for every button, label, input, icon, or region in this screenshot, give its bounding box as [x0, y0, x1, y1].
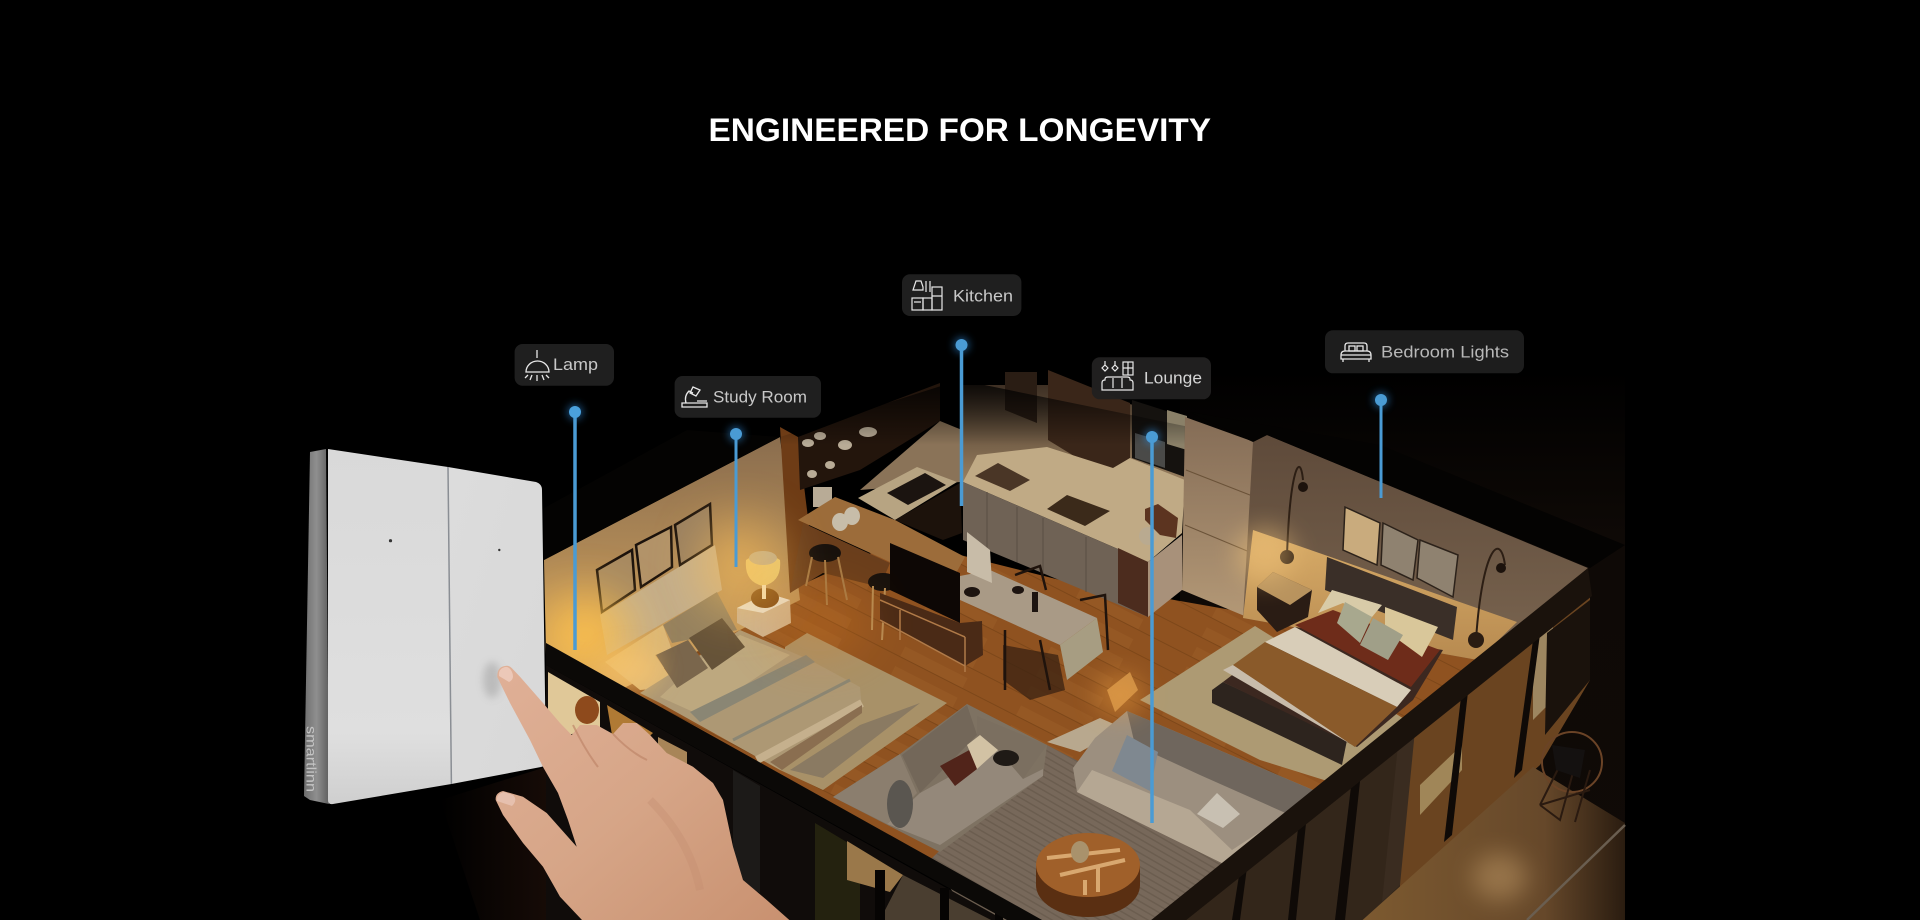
sofa right: [1073, 711, 1313, 868]
kitchen left counter: [858, 467, 957, 520]
warm lighting: [540, 370, 1295, 717]
switch left rocker: [328, 449, 451, 804]
kitchen left backsplash: [860, 421, 962, 490]
toaster: [1145, 504, 1178, 538]
icon: pendant lamp: [525, 350, 549, 381]
breakfast bar: [790, 497, 965, 640]
lounge rug: [930, 745, 1270, 920]
rug bedroom one: [780, 633, 947, 790]
label: Lounge: Lounge: [1144, 370, 1202, 388]
window zone below left beam: [546, 665, 1040, 920]
balcony floor: [1357, 767, 1625, 920]
switch indicator dots: [389, 539, 500, 551]
apartment cutaway scene: [540, 370, 1625, 920]
kitchen back wall and cabinets: [962, 370, 1187, 617]
sinks: [975, 463, 1030, 491]
glass zone below right beam: [1163, 597, 1590, 920]
label: Bedroom Lights: Bedroom Lights: [1381, 344, 1509, 362]
label: Bedroom Lights: [1325, 330, 1524, 373]
side table: [1047, 718, 1123, 752]
balcony railing: [1527, 825, 1625, 920]
counter top: [963, 447, 1185, 562]
bedroom rug: [1140, 626, 1470, 785]
dark surround of the apartment: [440, 370, 1625, 920]
knuckle shading: [573, 725, 647, 767]
brand text: smartlinn: [304, 726, 320, 792]
pin: Kitchen: [954, 337, 970, 506]
sofa left: [833, 704, 1047, 852]
icon: desk lamp: [682, 387, 707, 407]
icon: kitchen: [912, 281, 942, 310]
pin: Study Room: [728, 426, 744, 567]
fingernails: [499, 667, 513, 682]
dining table and TV: [880, 532, 1138, 712]
switch right rocker: [448, 467, 546, 784]
wardrobe: [1182, 417, 1268, 620]
bedroom one wall: [544, 437, 800, 690]
label: Lounge: [1092, 357, 1211, 399]
label: Kitchen: [902, 274, 1021, 316]
title: ENGINEERED FOR LONGEVITY: [708, 112, 1211, 148]
bed one: [605, 592, 862, 770]
label: Study Room: [675, 376, 821, 418]
label: Kitchen: Kitchen: [953, 288, 1013, 306]
wall lamps: [1287, 467, 1505, 640]
wood floor: [546, 540, 1588, 920]
bed two: [1212, 557, 1457, 765]
balcony chair: [1540, 732, 1602, 822]
smart switch: [304, 449, 546, 804]
wall art: [597, 504, 712, 612]
icon: bed: [1341, 343, 1371, 362]
icon: sofa and pendants: [1102, 361, 1133, 390]
label: Lamp: [515, 344, 614, 386]
hand pressing the switch: [496, 666, 795, 920]
label: Lamp: Lamp: [553, 356, 598, 374]
bedroom two wall: [1243, 435, 1588, 660]
label: Study Room: Study Room: [713, 388, 807, 406]
switch divider: [448, 467, 451, 784]
lamp and bedside table: [737, 551, 791, 637]
ceiling band and beams: [544, 412, 1625, 920]
pin: Lamp: [567, 404, 583, 650]
kitchen shelving wall: [780, 383, 962, 593]
switch metal frame: [304, 449, 329, 804]
pin: Bedroom Lights: [1373, 392, 1389, 498]
pin: Lounge: [1144, 429, 1160, 823]
finger shadow: [483, 662, 501, 698]
infographic canvas: [304, 118, 1626, 920]
coffee table: [1036, 833, 1140, 917]
